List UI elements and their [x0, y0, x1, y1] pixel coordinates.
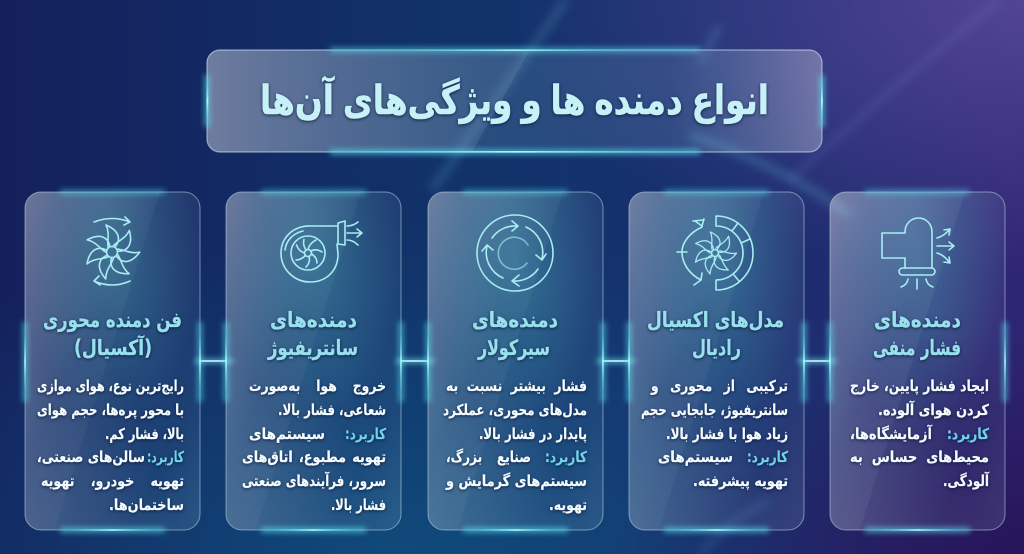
text block: mixed flow: زیاد هوا با فشار بالا. — [666, 425, 788, 443]
icon: axial fan — [84, 217, 140, 285]
icon: circular arrows — [477, 215, 553, 291]
heading: mixed flow — [647, 308, 784, 360]
heading: axial fan — [43, 308, 182, 360]
text block: circular: فشار بیشتر نسبت به — [446, 377, 587, 395]
heading: centrifugal — [267, 308, 358, 360]
text block: negative pressure — [850, 377, 990, 490]
text block: axial fan: ساختمان‌ها. — [109, 496, 184, 514]
panel: negative pressure — [828, 190, 1007, 532]
text block: mixed flow — [641, 377, 788, 491]
text block: axial fan: رایج‌ترین نوع، هوای موازی — [37, 377, 184, 395]
text block: mixed flow: کاربرد: — [747, 448, 788, 466]
heading: circular: سیرکولار — [477, 336, 550, 360]
panel: mixed flow — [627, 190, 806, 532]
text block: axial fan: بالا، فشار کم. — [105, 425, 184, 443]
text block: negative pressure: کردن هوای آلوده. — [878, 401, 989, 419]
text block: axial fan: تهویه خودرو، تهویه — [41, 472, 184, 490]
heading: circular — [472, 308, 558, 360]
icon: negative pressure hood — [882, 218, 954, 289]
text block: circular: مدل‌های محوری، عملکرد — [443, 401, 587, 419]
text block: centrifugal — [242, 377, 386, 514]
text block: centrifugal: تهویه مطبوع، اتاق‌های — [242, 448, 386, 466]
icon: centrifugal blower — [281, 221, 362, 282]
text block: circular: پایدار در فشار بالا. — [479, 425, 587, 444]
text block: axial fan: با محور پره‌ها، حجم هوای — [37, 401, 184, 420]
text block: negative pressure: آلودگی. — [943, 472, 990, 490]
heading: negative pressure — [873, 308, 961, 360]
heading: negative pressure: فشار منفی — [873, 336, 961, 360]
text block: negative pressure: کاربرد: — [947, 425, 989, 443]
heading: circular: دمنده‌های — [472, 308, 558, 332]
text block: centrifugal: کاربرد: — [345, 425, 386, 443]
text block: axial fan — [37, 377, 184, 514]
text block: centrifugal: فشار بالا. — [331, 496, 386, 514]
panel: axial fan — [23, 190, 202, 532]
heading: mixed flow: رادیال — [692, 336, 741, 360]
text block: axial fan: سالن‌های صنعتی، — [37, 448, 145, 466]
text block: circular: کاربرد: — [545, 448, 587, 466]
text block: mixed flow: تهویه پیشرفته. — [693, 472, 788, 491]
icon: mixed flow fan — [677, 216, 753, 290]
text block: centrifugal: سیستم‌های — [249, 425, 325, 443]
text block: mixed flow: سانتریفیوژ، جابجایی حجم — [641, 401, 788, 419]
heading: centrifugal: سانتریفیوژ — [267, 336, 358, 360]
text block: axial fan: کاربرد: — [147, 448, 184, 466]
title panel — [205, 48, 824, 154]
text block: centrifugal: سرور، فرآیندهای صنعتی — [242, 472, 386, 490]
text block: circular: سیستم‌های گرمایش و — [445, 472, 587, 490]
text block: centrifugal: شعاعی، فشار بالا. — [278, 401, 386, 419]
heading: axial fan: فن دمنده محوری — [43, 308, 182, 332]
heading: centrifugal: دمنده‌های — [270, 308, 357, 332]
text block: negative pressure: آزمایشگاه‌ها، — [850, 425, 933, 443]
panel: centrifugal — [224, 190, 403, 532]
heading: mixed flow: مدل‌های اکسیال — [647, 308, 784, 332]
text block: circular: صنایع بزرگ، — [446, 448, 531, 466]
heading: negative pressure: دمنده‌های — [874, 308, 961, 332]
text block: circular: تهویه. — [549, 496, 587, 514]
text block: mixed flow: سیستم‌های — [658, 448, 733, 466]
heading: axial fan: (آکسیال) — [74, 335, 152, 360]
text block: circular — [443, 377, 587, 514]
text block: centrifugal: خروج هوا به‌صورت — [249, 377, 386, 395]
text block: mixed flow: ترکیبی از محوری و — [650, 377, 788, 395]
text block: negative pressure: ایجاد فشار پایین، خارج — [850, 377, 989, 396]
connector lines between cards — [195, 359, 836, 363]
panel: circular — [426, 190, 605, 532]
title text: انواع دمنده ها و ویژگی‌های آن‌ها — [260, 75, 769, 124]
text block: negative pressure: محیط‌های حساس به — [850, 448, 989, 466]
